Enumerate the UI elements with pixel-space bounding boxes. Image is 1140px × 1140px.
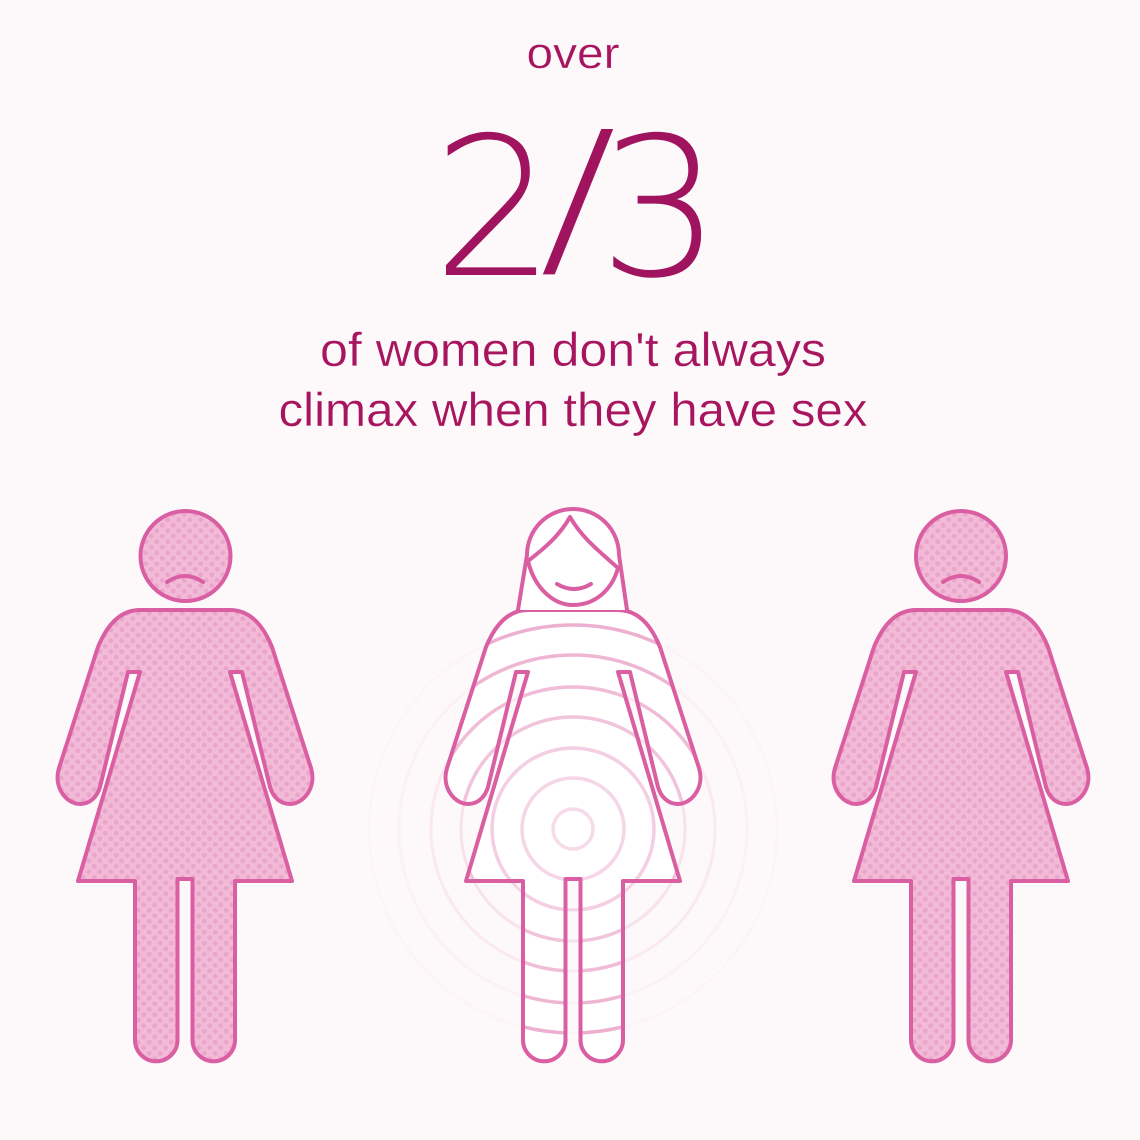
figure: left unhappy woman	[58, 511, 312, 1061]
caption: of women don't always	[320, 323, 826, 376]
figure: right unhappy woman	[834, 511, 1088, 1061]
big statistic: 2/3: 3	[599, 96, 721, 321]
body	[446, 610, 700, 1061]
big statistic: 2/3: 2	[433, 96, 555, 321]
vibration rings outside the figure	[369, 625, 777, 1033]
caption: climax when they have sex	[278, 383, 868, 436]
big statistic: 2/3	[433, 94, 721, 321]
caption	[278, 323, 868, 436]
big statistic: 2/3: /	[539, 94, 617, 300]
head and hair	[518, 509, 627, 610]
body outline	[446, 610, 700, 1061]
figure: centre happy woman	[444, 507, 702, 1064]
rings inside body	[452, 623, 694, 1034]
heading: over: over	[526, 29, 620, 78]
